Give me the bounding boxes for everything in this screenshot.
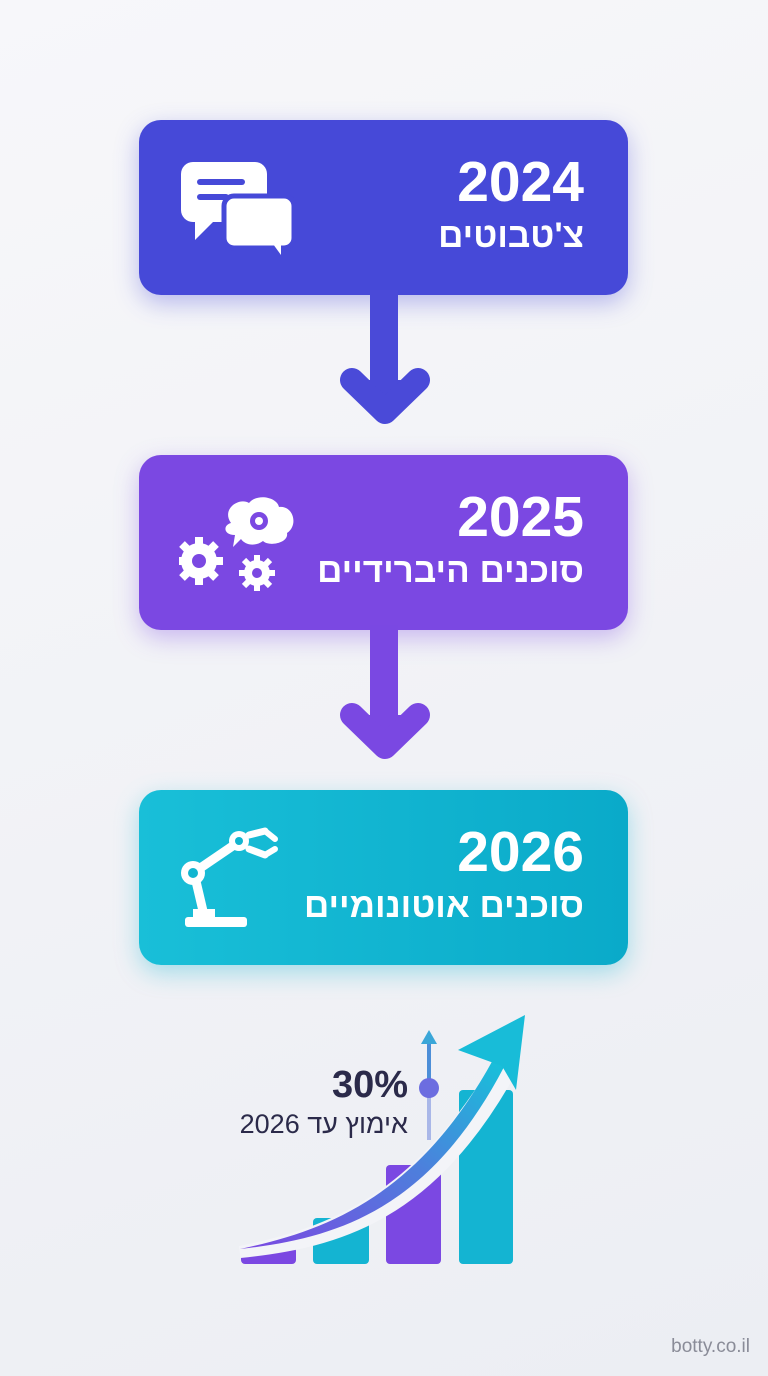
arrow 2 xyxy=(340,630,430,759)
arrow 1 xyxy=(340,295,430,424)
footer: domain: botty.co.il xyxy=(671,1336,750,1357)
stat text: אימוץ עד 2026 xyxy=(240,1109,408,1139)
year 2025: 2025 xyxy=(457,485,584,549)
card: 2025 hybrid agents xyxy=(139,455,628,630)
stat text xyxy=(240,1064,408,1139)
label: סוכנים אוטונומיים xyxy=(304,886,584,925)
year 2024: 2024 xyxy=(457,150,584,214)
year 2026: 2026 xyxy=(457,820,584,884)
label: צ'טבוטים xyxy=(438,216,584,255)
icon: robot arm xyxy=(181,828,278,927)
card: 2026 autonomous agents xyxy=(139,790,628,965)
rising arrow xyxy=(240,1015,525,1252)
card: 2024 chatbots xyxy=(139,120,628,295)
icon: gears and thought cloud xyxy=(179,497,294,591)
bars xyxy=(241,1090,513,1264)
label: סוכנים היברידיים xyxy=(317,551,584,590)
small indicator arrow xyxy=(419,1030,439,1140)
stat text: 30% xyxy=(332,1064,408,1106)
icon: chat bubbles xyxy=(181,162,292,255)
chart: growth bars with arrow xyxy=(240,1015,525,1264)
